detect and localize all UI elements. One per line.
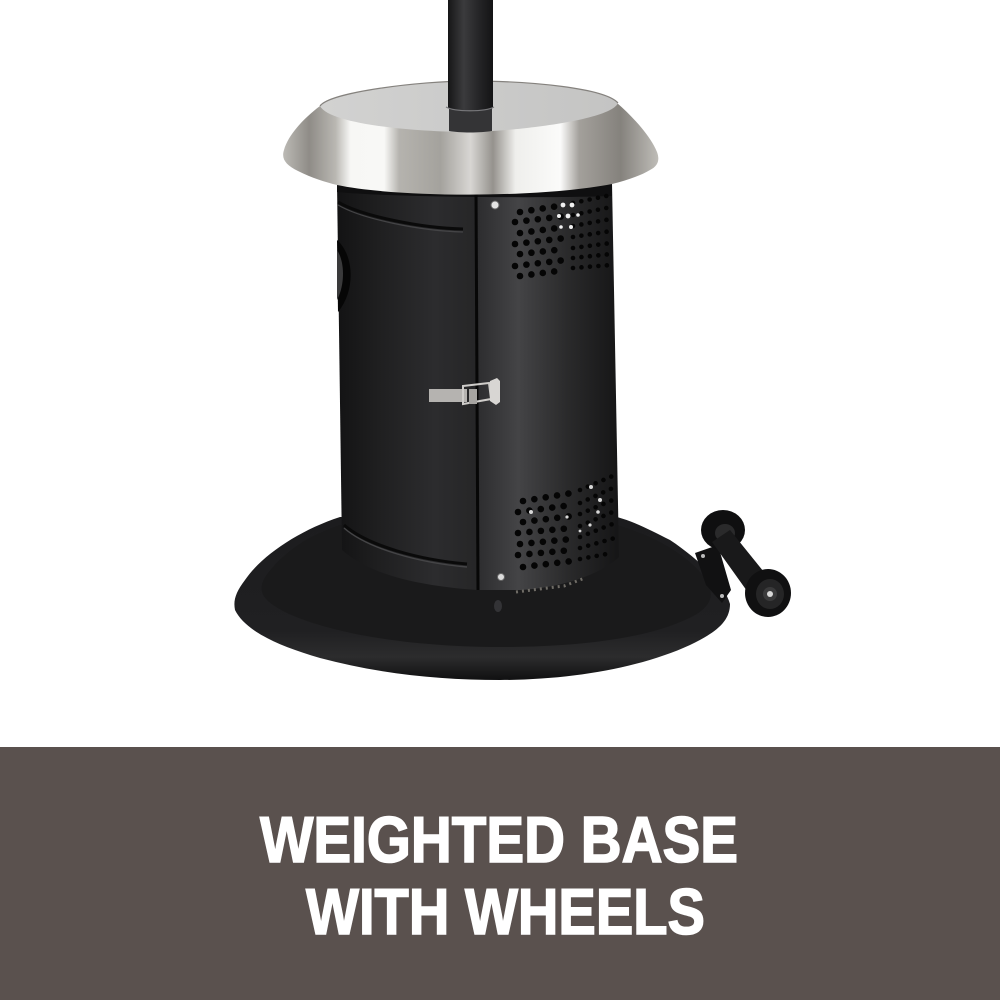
top shadow [337,183,612,197]
lower vents [518,475,615,567]
screws [491,201,499,209]
pole [446,0,494,132]
steel dome top [283,81,658,195]
heading: WITH WHEELS [306,875,705,948]
upper vent see-through holes [557,203,580,229]
door seam [476,190,478,590]
lower door ridge [344,525,467,564]
wheel axle arm [712,530,772,598]
upper door ridge [338,202,463,229]
upper vents [515,195,611,276]
cylinder body [337,183,619,592]
access door [337,183,478,590]
back wheel [701,510,745,550]
base highlight [494,600,502,612]
lower vent see-through holes [529,485,602,532]
outer panel [476,183,619,590]
wheel bracket [695,545,731,603]
latch [429,378,500,405]
weighted base [234,517,730,680]
door hand hole [337,240,351,312]
caption band [0,747,1000,1000]
bottom bracket [516,578,585,592]
dome top surface [320,81,618,132]
front wheel [745,569,791,617]
wheels [695,510,791,617]
heading [259,803,738,948]
pole reflection [449,108,492,132]
illustration: patio heater base with wheels [234,0,791,680]
